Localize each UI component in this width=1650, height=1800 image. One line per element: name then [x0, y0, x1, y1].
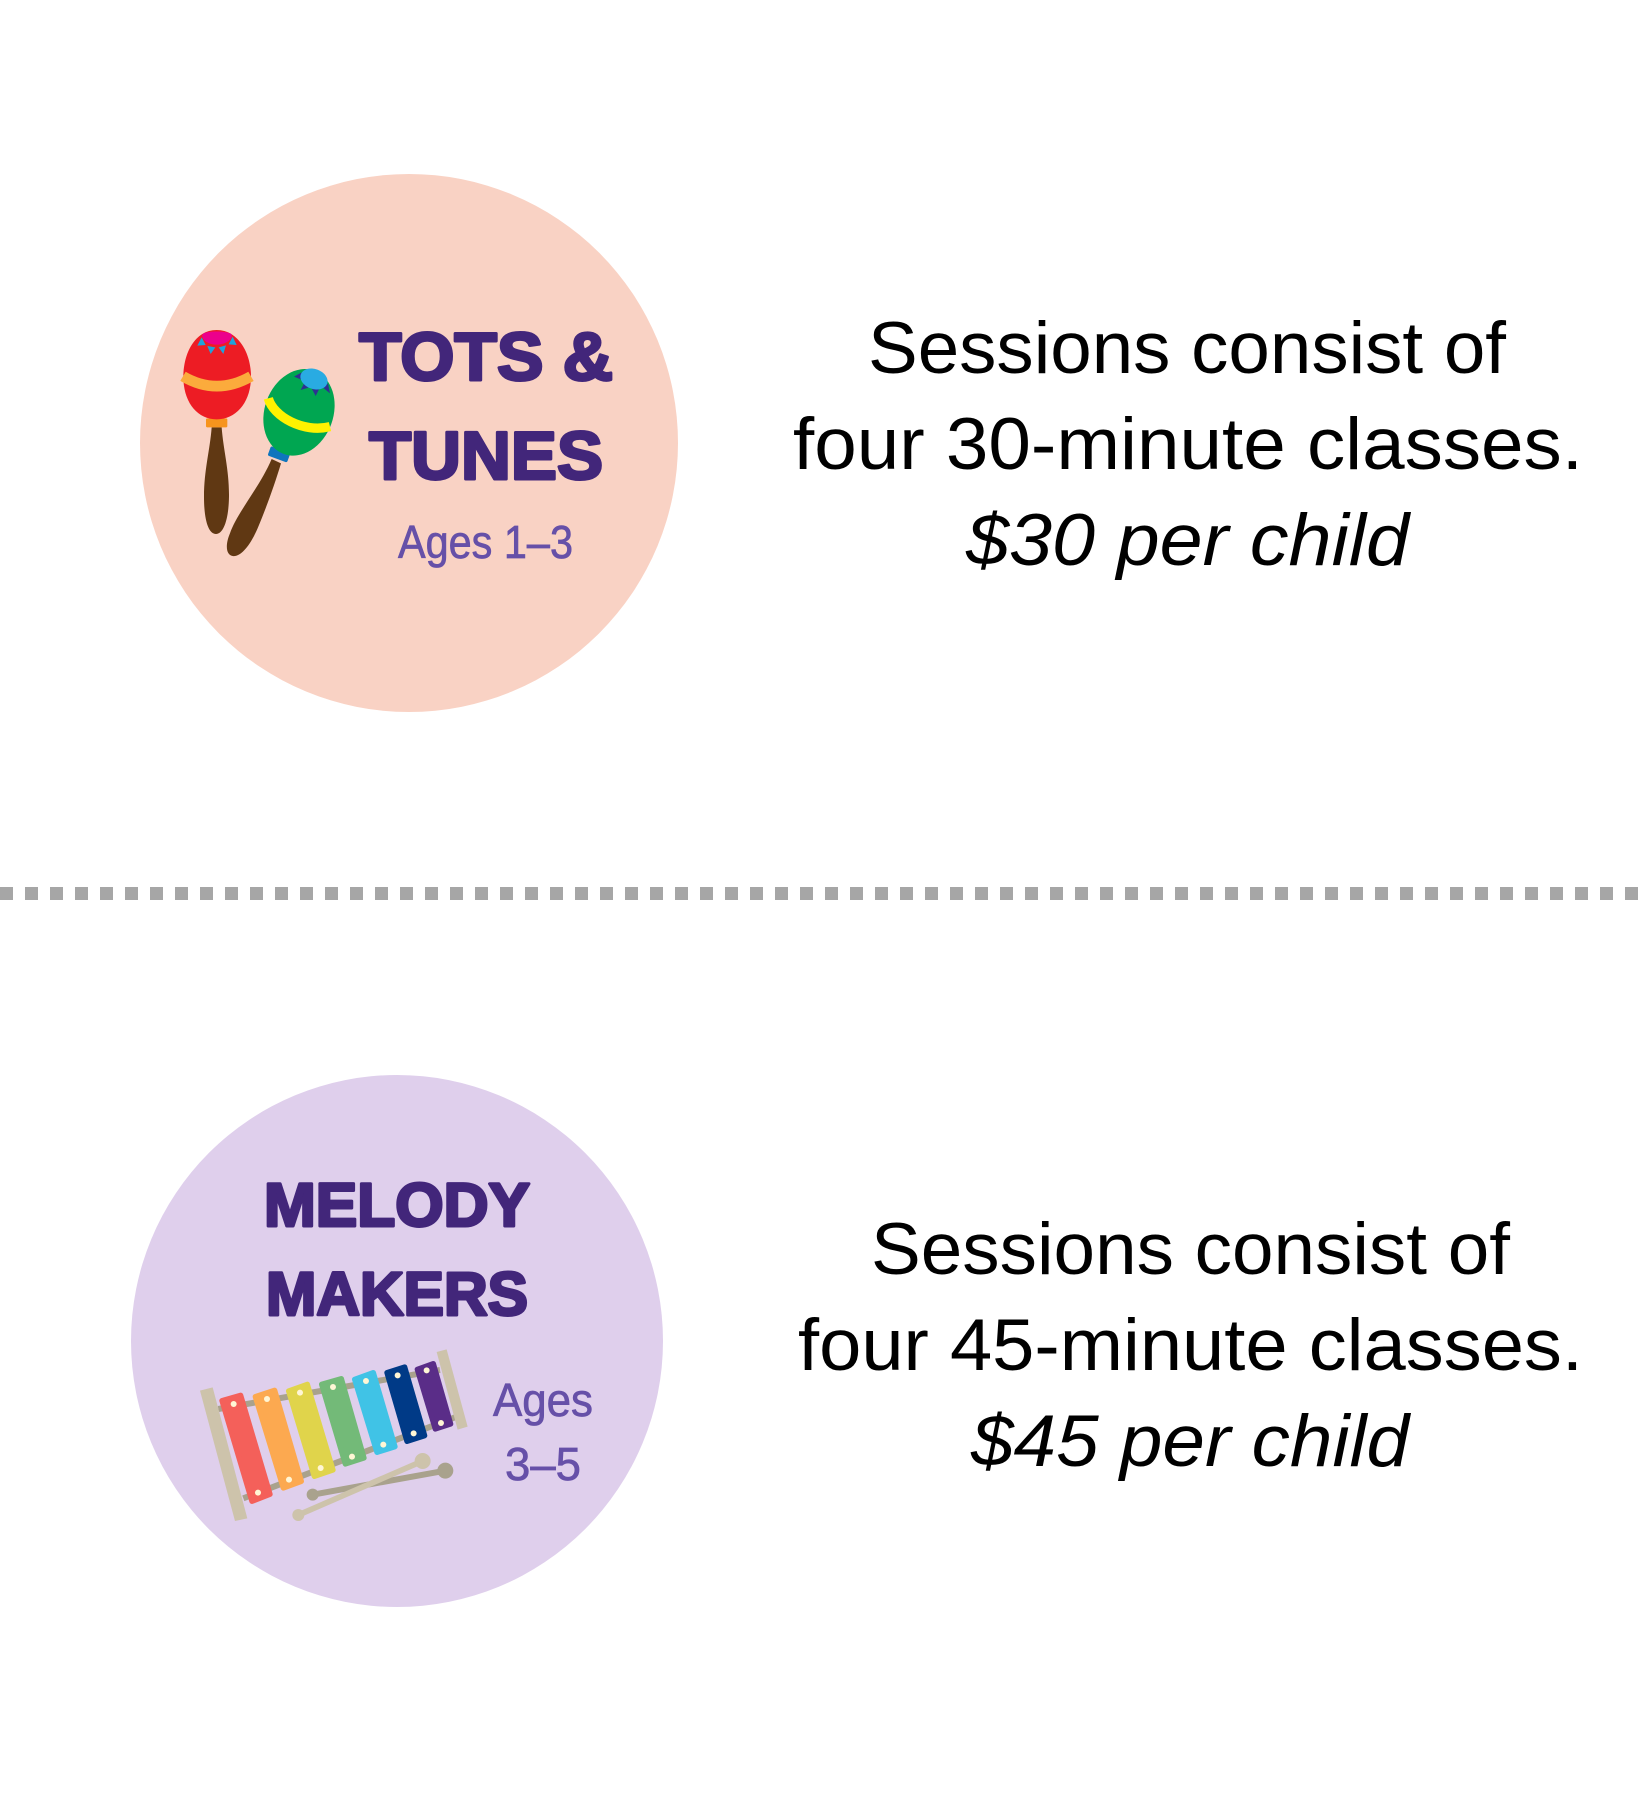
dotted divider [0, 887, 1650, 900]
text block: Tots & Tunes session details: Sessions consist of [868, 308, 1507, 389]
panel: Tots & Tunes badge [140, 174, 678, 712]
age range: Ages 3–5: Ages [493, 1374, 593, 1426]
age range: Ages 3–5 [493, 1374, 593, 1490]
text block: Melody Makers session details: Sessions consist of [871, 1209, 1511, 1290]
badge title: Melody Makers: MAKERS [266, 1260, 528, 1328]
text block: Melody Makers session details: $45 per child [970, 1401, 1412, 1482]
text block: Melody Makers session details: four 45-minute classes. [798, 1305, 1583, 1386]
badge circle: peach [140, 174, 678, 712]
text block: Melody Makers session details [798, 1209, 1583, 1482]
badge title: Tots & Tunes: TOTS & [359, 319, 613, 395]
text block: Tots & Tunes session details: $30 per child [965, 500, 1412, 581]
text block: Tots & Tunes session details: four 30-minute classes. [793, 404, 1583, 485]
badge title: Tots & Tunes: TUNES [369, 418, 603, 494]
badge title: Melody Makers [264, 1171, 530, 1328]
icon: xylophone [200, 1349, 468, 1521]
badge title: Tots & Tunes [359, 319, 613, 494]
text block: Tots & Tunes session details [793, 308, 1583, 581]
badge circle: lavender [131, 1075, 663, 1607]
icon: maracas [183, 330, 346, 556]
age range: Ages 3–5: 3–5 [505, 1438, 581, 1490]
age range: Ages 1–3: Ages 1–3 [398, 516, 573, 568]
panel: Melody Makers badge [131, 1075, 663, 1607]
badge title: Melody Makers: MELODY [264, 1171, 530, 1239]
